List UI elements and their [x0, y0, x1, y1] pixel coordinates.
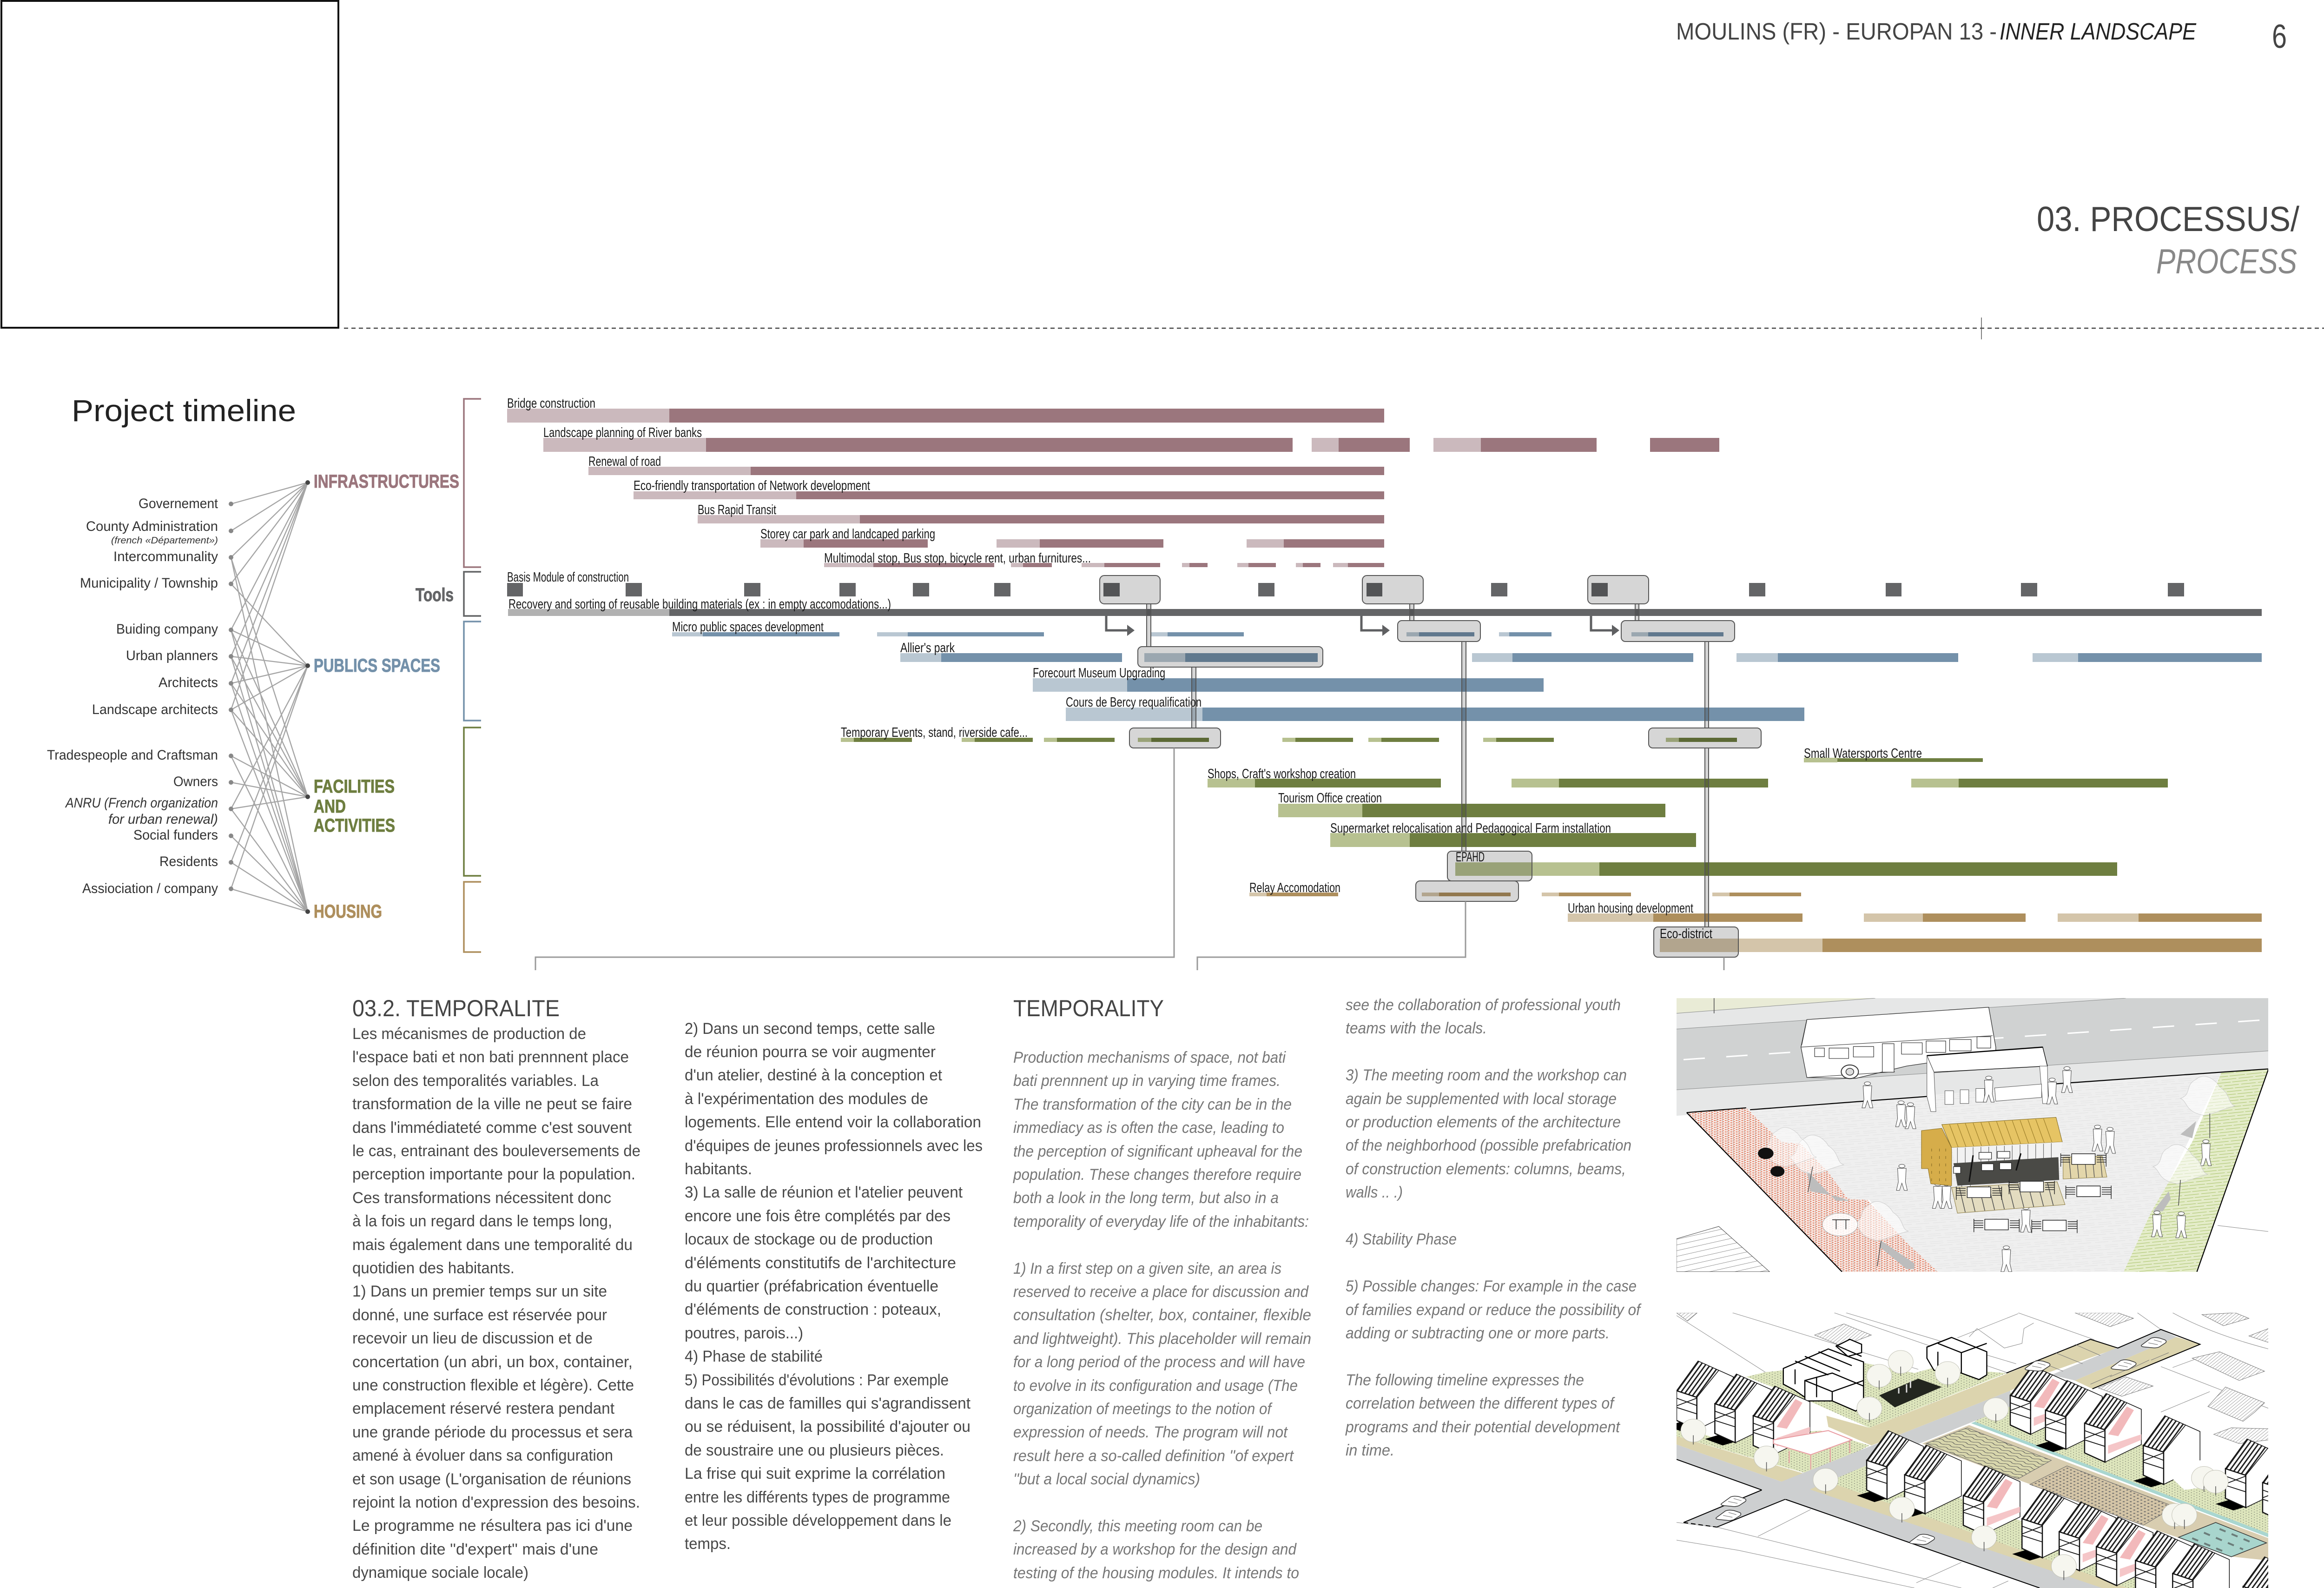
body: increased by a workshop for the design and	[1013, 1541, 1297, 1558]
bar: Bus Rapid Transit	[698, 503, 1384, 523]
body: quotidien des habitants.	[352, 1259, 515, 1277]
bar: Landscape planning of River banks: Landscape planning of River banks	[543, 425, 702, 440]
body: testing of the housing modules. It intends to	[1013, 1564, 1299, 1582]
body: définition dite ''d'expert'' mais d'une	[352, 1541, 598, 1558]
body: result here a so-called definition ''of expert	[1013, 1447, 1294, 1465]
body: and lightweight). This placeholder will remain	[1013, 1330, 1311, 1348]
bar: Shops, Craft's workshop	[1208, 767, 2168, 787]
modular cube buildings	[1783, 1337, 1987, 1411]
body: selon des temporalités variables. La	[352, 1072, 599, 1090]
bar: Micro public spaces	[672, 620, 1723, 636]
bar: Storey car park: Storey car park and landcaped parking	[760, 527, 935, 542]
category labels: AND	[314, 796, 346, 817]
Basis Module squares	[507, 570, 2184, 596]
bar: Eco-friendly transportation	[634, 478, 1384, 499]
body	[352, 1025, 640, 1581]
body: emplacement réservé restera pendant	[352, 1400, 615, 1417]
bar: Forecourt Museum Upgrading	[1033, 666, 1544, 692]
header: project title: INNER LANDSCAPE	[2000, 18, 2197, 45]
bar: EPAHD	[1455, 850, 2117, 876]
text column: english continued: adding or subtracting one or more parts.	[1346, 1324, 1610, 1342]
illustration: housing neighbourhood axonometric	[1667, 1313, 2319, 1588]
bar: Tourism Office: Tourism Office creation	[1278, 791, 1382, 806]
body: immediacy as is often the case, leading to	[1013, 1119, 1284, 1137]
playground toys	[1758, 1148, 1858, 1236]
text column: french continued: logements. Elle entend voir la collaboration	[685, 1113, 981, 1131]
text column: french continued: 4) Phase de stabilité	[685, 1348, 823, 1365]
text column: french continued: ou se réduisent, la possibilité d'ajouter ou	[685, 1418, 971, 1436]
text column: french continued: locaux de stockage ou de production	[685, 1231, 933, 1248]
text column: french continued: entre les différents types de programme	[685, 1489, 950, 1506]
body: bati prennnent up in varying time frames.	[1013, 1072, 1281, 1090]
text column: english continued: of construction elements: columns, beams,	[1346, 1160, 1626, 1178]
illustration: temporary pavilion on square	[1677, 998, 2269, 1272]
body: 2) Secondly, this meeting room can be	[1013, 1517, 1262, 1535]
text column: french continued: d'éléments constitutifs de l'architecture	[685, 1254, 956, 1272]
text column: french continued: de soustraire une ou plusieurs pièces.	[685, 1442, 944, 1459]
heading: 03.2. TEMPORALITE	[352, 995, 560, 1021]
actor labels: Social funders	[133, 827, 218, 843]
text column: english continued: in time.	[1346, 1442, 1394, 1459]
bar: Eco-friendly transportation: Eco-friendly transportation of Network development	[634, 478, 870, 493]
text column: english continued: 4) Stability Phase	[1346, 1231, 1457, 1248]
connection lines	[231, 483, 308, 912]
text column: english continued	[1345, 996, 1642, 1459]
heading: Project timeline: Project timeline	[72, 393, 296, 428]
category labels: PUBLICS SPACES	[314, 655, 440, 676]
body: une grande période du processus et sera	[352, 1423, 633, 1441]
actor labels: ANRU (French organization	[65, 795, 218, 811]
bar: Multimodal stop: Multimodal stop, Bus stop, bicycle rent, urban furnitures...	[824, 551, 1091, 566]
body: Production mechanisms of space, not bati	[1013, 1049, 1286, 1066]
actor labels: (french «Département»)	[111, 536, 218, 546]
bar: Tourism Office	[1278, 791, 1665, 817]
body: et son usage (L'organisation de réunions	[352, 1470, 631, 1488]
bar: Temporary Events	[841, 725, 1737, 742]
bar: EPAHD: EPAHD	[1456, 850, 1485, 865]
body: ''but a local social dynamics)	[1013, 1470, 1200, 1488]
text column: french continued: 3) La salle de réunion et l'atelier peuvent	[685, 1184, 963, 1201]
people	[1862, 1067, 2212, 1272]
header: project title: MOULINS (FR) - EUROPAN 13 -	[1676, 18, 1997, 45]
text column: french continued: de réunion pourra se voir augmenter	[685, 1043, 936, 1061]
text column: english continued: 3) The meeting room and the workshop can	[1346, 1066, 1627, 1084]
gantt timeline	[507, 396, 2262, 970]
body: 1) In a first step on a given site, an area is	[1013, 1260, 1281, 1277]
text column: english continued: see the collaboration of professional youth	[1346, 996, 1621, 1014]
body: mais également dans une temporalité du	[352, 1236, 633, 1254]
text column: TEMPORALITY english	[1013, 995, 1311, 1582]
bar: Recovery and sorting	[508, 597, 2262, 616]
category brackets	[464, 399, 481, 952]
bar: Shops, Craft's workshop: Shops, Craft's workshop creation	[1208, 767, 1356, 781]
text column: french continued	[685, 1020, 983, 1553]
body: to evolve in its configuration and usage (The	[1013, 1377, 1298, 1395]
Basis Module squares: Basis Module of construction	[507, 570, 629, 585]
category labels	[314, 471, 459, 922]
actor labels: Municipality / Township	[80, 576, 218, 591]
body: both a look in the long term, but also in a	[1013, 1189, 1279, 1207]
bar: Recovery and sorting: Recovery and sorting of reusable building materials (ex : in empty accomodations...)	[508, 597, 891, 612]
actor labels: Owners	[173, 774, 218, 789]
bar: Renewal of road: Renewal of road	[588, 454, 661, 469]
text column: french continued: habitants.	[685, 1160, 752, 1178]
bar: Small Watersports Centre: Small Watersports Centre	[1804, 746, 1922, 761]
actor dots	[229, 502, 233, 891]
bar: Eco-district: Eco-district	[1660, 926, 1712, 941]
body: l'espace bati et non bati prennnent place	[352, 1048, 629, 1066]
row of houses upper right	[2010, 1366, 2319, 1522]
public spaces bars	[672, 620, 2262, 721]
actor labels: Tradespeople and Craftsman	[47, 748, 218, 763]
container pavilion	[1921, 1117, 2107, 1213]
cars	[1716, 1337, 2166, 1545]
body: organization of meetings to the notion of	[1013, 1400, 1273, 1418]
highlight boxes and connectors	[1100, 576, 1761, 957]
bar: Relay Accomodation: Relay Accomodation	[1249, 880, 1340, 895]
bar: Eco-district	[1660, 926, 2262, 952]
body: dans l'immédiateté comme c'est souvent	[352, 1119, 632, 1137]
context lines and buildings	[1677, 1313, 2269, 1588]
text column: french continued: 5) Possibilités d'évolutions : Par exemple	[685, 1371, 949, 1389]
text column: french continued: d'équipes de jeunes professionnels avec les	[685, 1137, 983, 1155]
text column: french continued: temps.	[685, 1535, 731, 1553]
body: dynamique sociale locale)	[352, 1564, 528, 1581]
text column: english continued: again be supplemented with local storage	[1346, 1090, 1617, 1108]
body: 1) Dans un premier temps sur un site	[352, 1283, 607, 1300]
body: for a long period of the process and will have	[1013, 1353, 1305, 1371]
bar: Cours de Bercy requalification: Cours de Bercy requalification	[1066, 695, 1202, 710]
housing bars	[1249, 880, 2262, 952]
bar: Relay Accomodation	[1249, 880, 1801, 896]
body: Le programme ne résultera pas ici d'une	[352, 1517, 633, 1535]
body: The transformation of the city can be in the	[1013, 1096, 1292, 1113]
actor labels: Landscape architects	[92, 702, 218, 717]
body: recevoir un lieu de discussion et de	[352, 1330, 593, 1347]
body	[1013, 1049, 1311, 1582]
body: reserved to receive a place for discussion and	[1013, 1283, 1309, 1301]
body: population. These changes therefore require	[1013, 1166, 1301, 1184]
bar: Storey car park	[760, 527, 1384, 548]
page number: 6	[2272, 18, 2287, 55]
body: perception importante pour la population.	[352, 1165, 635, 1183]
actor labels: Governement	[139, 496, 218, 511]
body: consultation (shelter, box, container, flexible	[1013, 1306, 1311, 1324]
actor labels: County Administration	[86, 519, 218, 534]
text column: french continued: d'un atelier, destiné à la conception et	[685, 1066, 943, 1084]
heading: TEMPORALITY	[1013, 995, 1164, 1021]
text column: english continued: teams with the locals.	[1346, 1019, 1487, 1037]
section title: 03. PROCESSUS/	[2037, 199, 2299, 238]
text column: french continued: poutres, parois...)	[685, 1324, 803, 1342]
text column: 03.2 TEMPORALITE french	[352, 995, 640, 1581]
bus	[1801, 1007, 1996, 1079]
actor labels: Buiding company	[116, 622, 218, 637]
actor labels: Urban planners	[126, 648, 218, 663]
bar: Landscape planning of River banks	[543, 425, 1719, 452]
bar: Supermarket	[1330, 821, 1696, 847]
trees	[1681, 1350, 2228, 1580]
black plot with fountains	[1879, 1379, 1942, 1408]
text column: french continued: du quartier (préfabrication éventuelle	[685, 1277, 938, 1295]
bar: Multimodal stop	[824, 551, 1384, 567]
text column: english continued: walls .. .)	[1346, 1184, 1403, 1201]
body: amené à évoluer dans sa configuration	[352, 1447, 613, 1464]
actor labels: for urban renewal)	[108, 812, 218, 827]
body: Ces transformations nécessitent donc	[352, 1189, 611, 1207]
bar: Allier's park	[900, 641, 2262, 662]
text column: french continued: et leur possible développement dans le	[685, 1512, 951, 1529]
text column: french continued: d'éléments de construction : poteaux,	[685, 1301, 941, 1318]
infrastructure bars	[507, 396, 1719, 567]
body: donné, une surface est réservée pour	[352, 1306, 607, 1324]
text column: french continued: à l'expérimentation des modules de	[685, 1090, 928, 1108]
text column: french continued: La frise qui suit exprime la corrélation	[685, 1465, 945, 1482]
text column: english continued: or production elements of the architecture	[1346, 1113, 1621, 1131]
row of houses central	[1857, 1430, 2300, 1588]
bar: Allier's park: Allier's park	[900, 641, 955, 655]
actor labels: Architects	[158, 675, 218, 690]
actor labels: Residents	[159, 854, 218, 869]
text column: french continued: dans le cas de familles qui s'agrandissent	[685, 1395, 971, 1412]
body: le cas, entrainant des bouleversements de	[352, 1142, 640, 1160]
bar: Renewal of road	[588, 454, 1384, 475]
text column: english continued: 5) Possible changes: For example in the case	[1346, 1277, 1637, 1295]
section title: PROCESS	[2156, 242, 2297, 281]
facilities bars	[841, 725, 2168, 876]
section title	[2037, 199, 2299, 281]
target dots	[305, 480, 310, 914]
bar: Micro public spaces: Micro public spaces development	[672, 620, 824, 635]
arrows from tools to public spaces	[1106, 616, 1619, 636]
actor labels	[47, 496, 218, 896]
image placeholder frame	[1, 1, 338, 328]
bar: Bridge construction: Bridge construction	[507, 396, 595, 411]
text column: french continued: 2) Dans un second temps, cette salle	[685, 1020, 935, 1038]
body: Les mécanismes de production de	[352, 1025, 586, 1043]
actor labels: Intercommunality	[113, 549, 218, 564]
actor labels: Assiociation / company	[82, 881, 218, 896]
bar: Cours de Bercy requalification	[1066, 695, 1804, 721]
body: concertation (un abri, un box, container,	[352, 1353, 633, 1371]
text column: english continued: programs and their potential development	[1345, 1418, 1620, 1436]
bar: Bus Rapid Transit: Bus Rapid Transit	[698, 503, 776, 517]
text column: english continued: of the neighborhood (possible prefabrication	[1346, 1137, 1631, 1154]
category labels: INFRASTRUCTURES	[314, 471, 459, 492]
text column: french continued: encore une fois être complétés par des	[685, 1207, 951, 1225]
bar: Forecourt Museum Upgrading: Forecourt Museum Upgrading	[1033, 666, 1165, 681]
actors network diagram	[47, 471, 459, 922]
trees	[1714, 998, 2235, 1266]
text column: english continued: correlation between the different types of	[1346, 1395, 1615, 1412]
body: à la fois un regard dans le temps long,	[352, 1212, 612, 1230]
category labels: Tools	[416, 585, 454, 605]
category labels: FACILITIES	[314, 776, 395, 797]
category labels: ACTIVITIES	[314, 815, 395, 836]
category labels: HOUSING	[314, 901, 382, 922]
body: expression of needs. The program will not	[1013, 1423, 1288, 1441]
bar: Urban housing development	[1568, 901, 2262, 922]
ground: plots and streets	[1677, 1330, 2269, 1588]
bar: Urban housing development: Urban housing development	[1568, 901, 1693, 916]
text column: english continued: of families expand or reduce the possibility of	[1346, 1301, 1642, 1319]
body: transformation de la ville ne peut se faire	[352, 1095, 632, 1113]
bar: Supermarket: Supermarket relocalisation and Pedagogical Farm installation	[1330, 821, 1611, 836]
row of houses upper left	[1667, 1361, 1852, 1469]
tables and chairs	[1956, 1153, 2111, 1233]
bar: Bridge construction	[507, 396, 1384, 423]
text column: english continued: The following timeline expresses the	[1346, 1371, 1584, 1389]
tools bars	[507, 570, 2262, 636]
body: une construction flexible et légère). Cette	[352, 1376, 634, 1394]
body: rejoint la notion d'expression des besoins.	[352, 1494, 640, 1511]
bus shelter	[1927, 1047, 2048, 1112]
body: temporality of everyday life of the inhabitants:	[1013, 1213, 1309, 1231]
bar: Temporary Events: Temporary Events, stand, riverside cafe...	[841, 725, 1028, 740]
body: the perception of significant upheaval for the	[1013, 1143, 1302, 1160]
leader lines to text columns	[535, 748, 1724, 970]
